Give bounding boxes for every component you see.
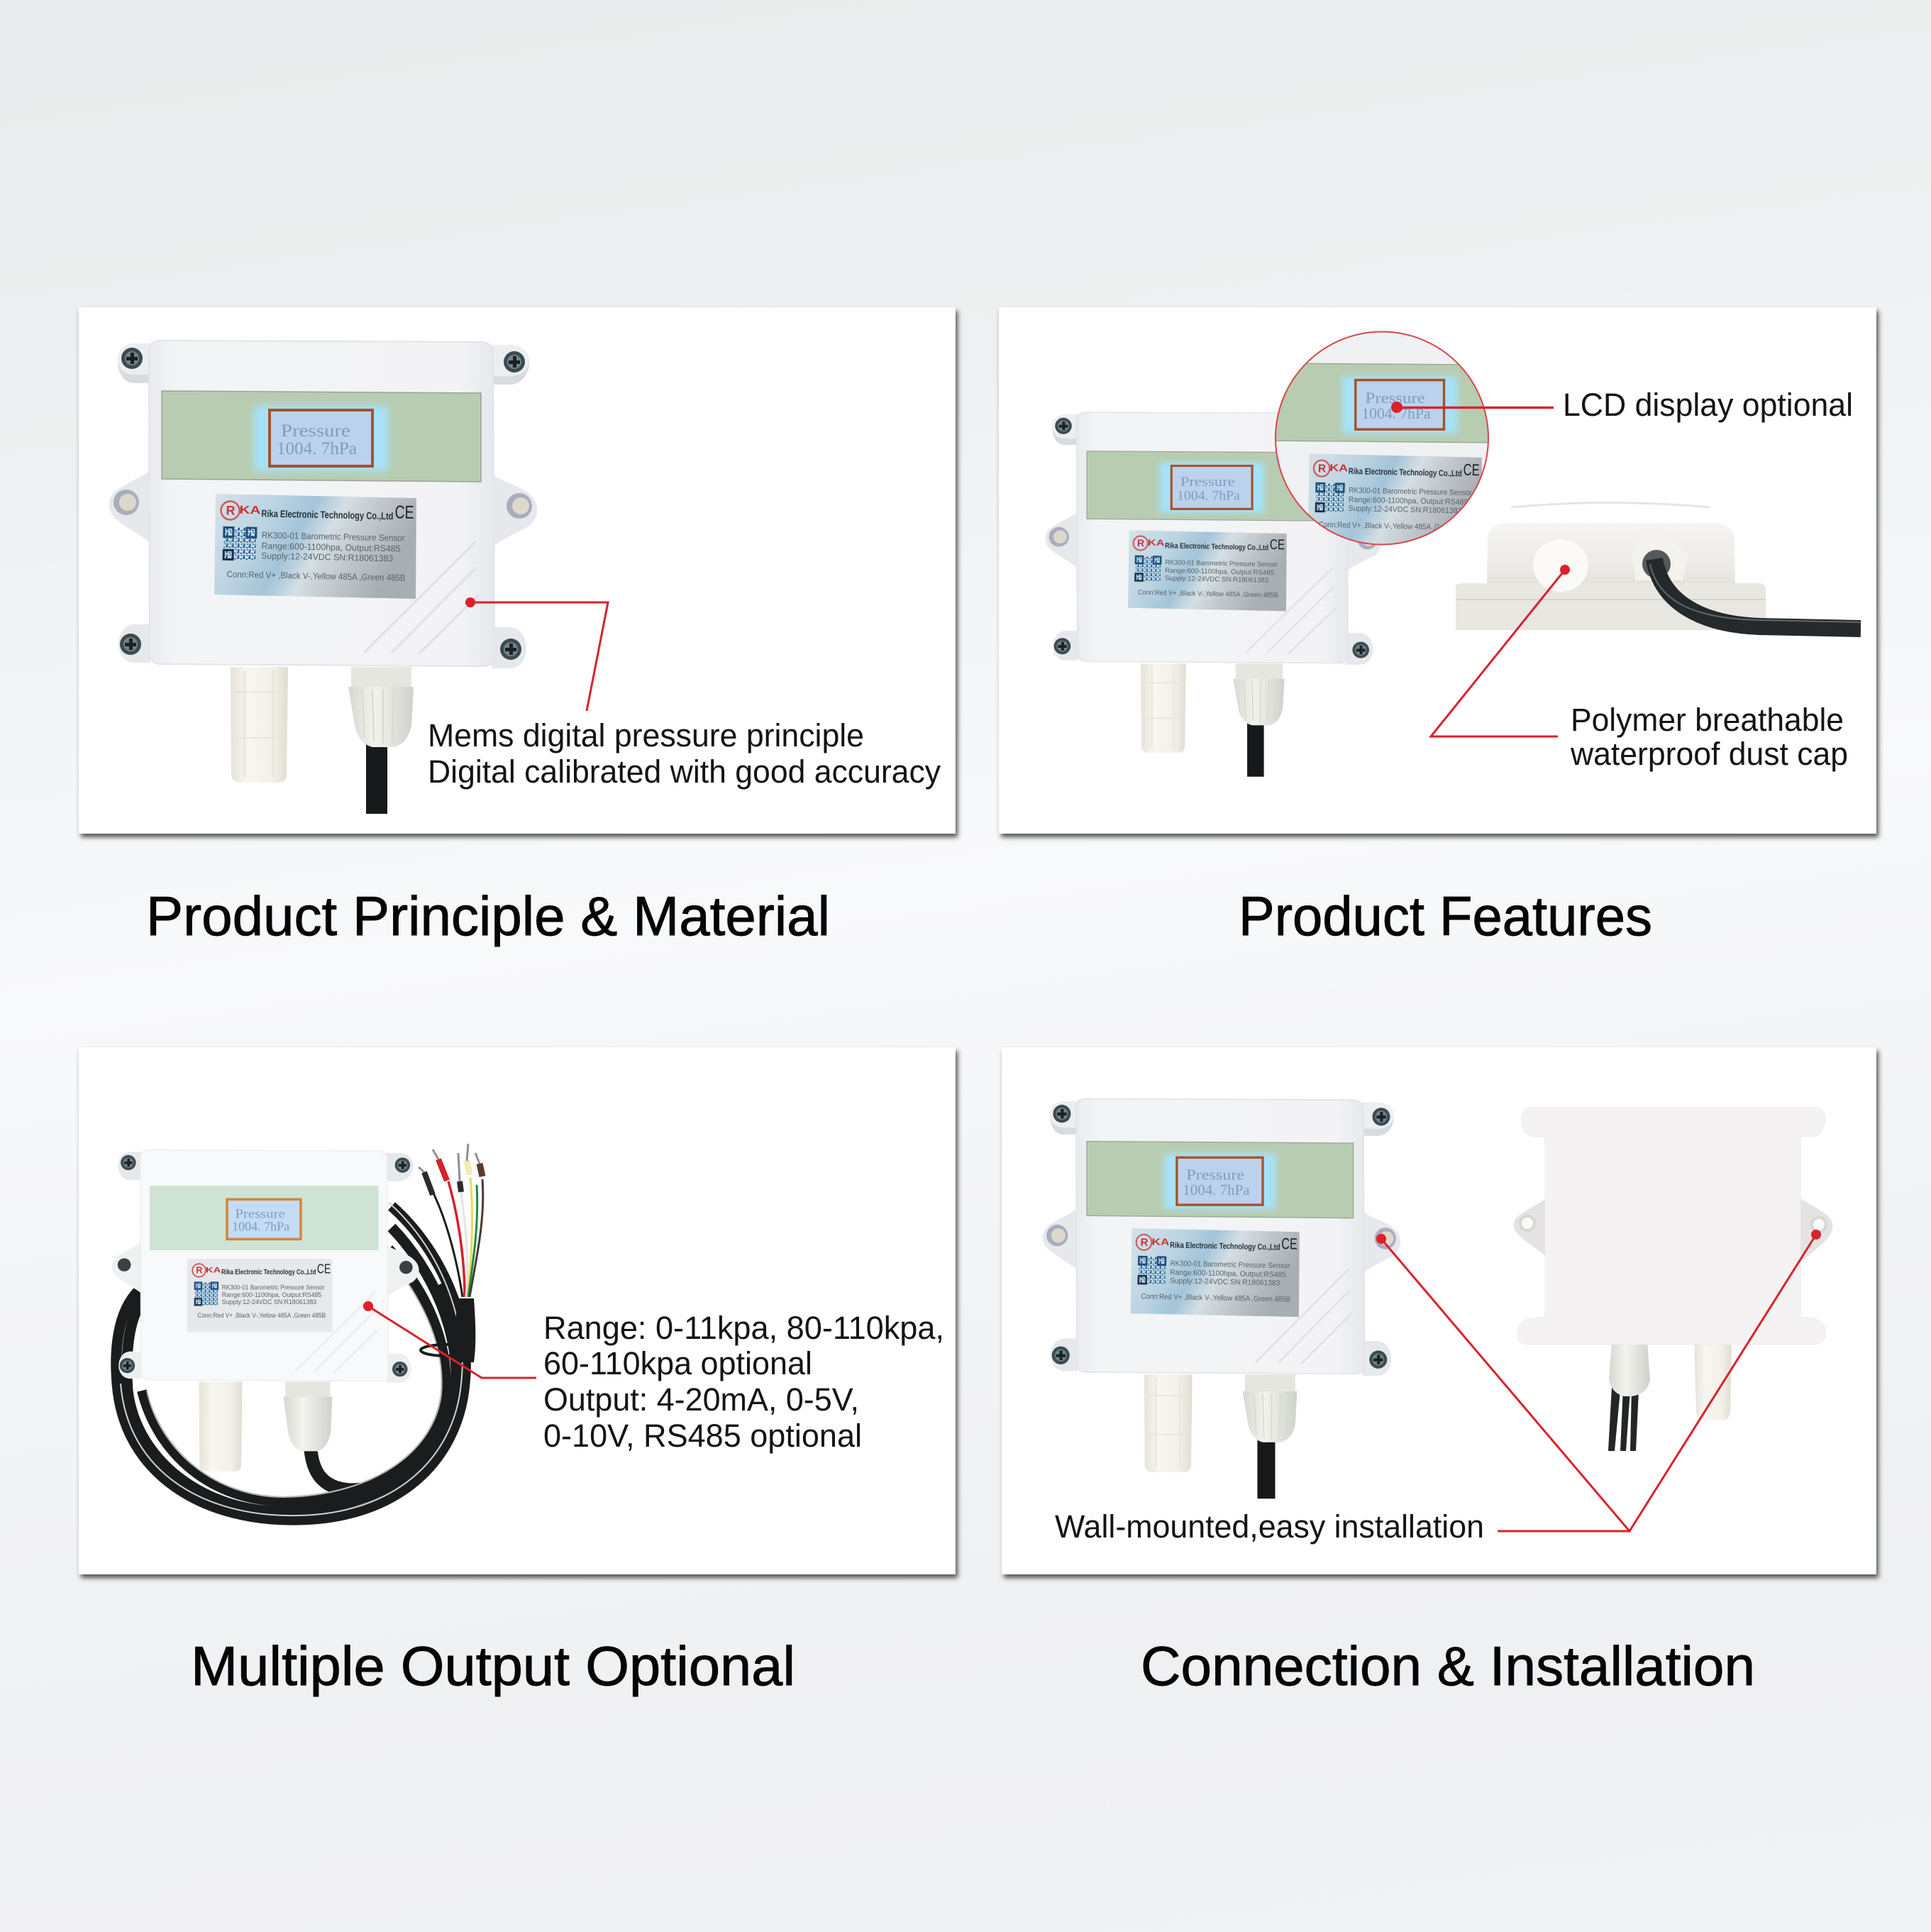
magnified circle of display and label: KA — [1329, 462, 1348, 473]
sensor photo: front view: Pressure — [281, 421, 350, 441]
callout text: Range: 0-11kpa, 80-110kpa, — [543, 1310, 944, 1346]
sensor photo: front view: Pressure — [1180, 475, 1235, 490]
sensor photo: front view with white body: KA — [206, 1266, 221, 1274]
callout text: Mems digital pressure principle — [428, 717, 864, 754]
magnified circle of display and label: R — [1318, 463, 1326, 475]
callout text — [543, 1310, 944, 1454]
heading: multiple output optional: Multiple Output Optional — [191, 1635, 795, 1697]
sensor photo: front view: CE — [1270, 537, 1285, 553]
sensor photo: front view with white body: 1004. 7hPa — [232, 1219, 289, 1233]
coiled black cable — [116, 1203, 465, 1520]
sensor photo: front view: Range:600-1100hpa, Output:RS485 — [1170, 1268, 1286, 1279]
magnified circle of display and label: Pressure — [1366, 390, 1425, 407]
callout text: Output: 4-20mA, 0-5V, — [543, 1381, 859, 1418]
callout text: Wall-mounted,easy installation — [1055, 1508, 1484, 1545]
sensor photo: front view: 1004. 7hPa — [277, 439, 357, 458]
sensor photo: front view with white body: CE — [317, 1262, 331, 1276]
sensor photo: front view — [1043, 1099, 1400, 1498]
panel: connection and installation — [1002, 1047, 1876, 1574]
sleeve and coloured wires with pins — [419, 1144, 483, 1362]
sensor photo: front view: Conn:Red V+ ,Black V-,Yellow 485A ,Green 485B — [226, 569, 406, 583]
sensor photo: front view: R — [1137, 537, 1144, 548]
sensor photo: front view with white body: RK300-01 Barometric Pressure Sensor — [222, 1284, 325, 1291]
panel: product features — [999, 307, 1876, 834]
sensor photo: front view: R — [1140, 1237, 1149, 1249]
panel: product principle and material — [79, 307, 956, 834]
heading: product features: Product Features — [1239, 885, 1652, 947]
dust cap pointer — [1431, 565, 1570, 736]
sensor photo: front view: 1004. 7hPa — [1177, 488, 1240, 503]
magnified circle of display and label: CE — [1463, 460, 1480, 479]
dust cap callout text: waterproof dust cap — [1570, 736, 1848, 772]
sensor photo: front view: KA — [1151, 1236, 1170, 1247]
magnified circle of display and label: Rika Electronic Technology Co.,Ltd — [1349, 466, 1462, 478]
magnified circle of display and label: Range:600-1100hpa, Output:RS485 — [1349, 495, 1468, 507]
panel: multiple output optional — [79, 1047, 956, 1574]
sensor photo: front view: KA — [239, 504, 261, 517]
heading: product principle and material: Product Principle & Material — [146, 885, 830, 947]
sensor photo: underside with dust cap and cable — [1456, 502, 1861, 630]
sensor photo: front view — [109, 341, 537, 814]
sensor photo: front view with white body: Supply:12-24VDC SN:R18061383 — [222, 1298, 316, 1306]
magnified circle of display and label: Conn:Red V+ ,Black V-,Yellow 485A ,Green 485B — [1319, 521, 1473, 532]
sensor photo: front view: RK300-01 Barometric Pressure Sensor — [1170, 1259, 1290, 1270]
magnified circle of display and label: Supply:12-24VDC SN:R18061383 — [1349, 504, 1462, 515]
sensor photo: front view with white body: Pressure — [235, 1207, 285, 1221]
callout text: 0-10V, RS485 optional — [543, 1418, 862, 1454]
sensor photo: front view: Pressure — [1186, 1166, 1244, 1183]
sensor photo: front view: Supply:12-24VDC SN:R18061383 — [1170, 1276, 1280, 1288]
sensor photo: front view: Supply:12-24VDC SN:R18061383 — [1165, 575, 1268, 585]
sensor photo: front view: Supply:12-24VDC SN:R18061383 — [261, 551, 393, 563]
callout pointer — [363, 1301, 536, 1378]
sensor photo: front view: Rika Electronic Technology Co.,Ltd — [1165, 541, 1268, 552]
callout pointer — [465, 597, 608, 711]
callout text: Digital calibrated with good accuracy — [428, 754, 941, 790]
sensor photo: front view — [1046, 412, 1382, 777]
callout text: 60-110kpa optional — [543, 1345, 812, 1381]
sensor photo: front view with white body: Conn:Red V+ ,Black V-,Yellow 485A ,Green 485B — [197, 1312, 326, 1319]
installation pointers — [1376, 1230, 1821, 1531]
sensor photo: front view: KA — [1148, 538, 1165, 548]
sensor photo: front view with white body: R — [196, 1265, 203, 1276]
sensor photo: front view: RK300-01 Barometric Pressure Sensor — [262, 530, 405, 543]
sensor photo: front view: Range:600-1100hpa, Output:RS485 — [1165, 567, 1274, 577]
sensor photo: front view with white body: Rika Electronic Technology Co.,Ltd — [221, 1269, 316, 1276]
sensor photo: front view: Conn:Red V+ ,Black V-,Yellow 485A ,Green 485B — [1141, 1292, 1290, 1304]
dust cap callout text — [1570, 702, 1848, 772]
sensor photo: front view: Range:600-1100hpa, Output:RS485 — [261, 541, 401, 554]
sensor photo: front view: CE — [1281, 1235, 1298, 1253]
sensor photo: front view: 1004. 7hPa — [1183, 1181, 1250, 1198]
sensor photo: front view: Rika Electronic Technology Co.,Ltd — [1170, 1240, 1280, 1252]
magnified circle of display and label: 1004. 7hPa — [1361, 405, 1431, 422]
sensor photo: front view with white body — [112, 1150, 419, 1472]
heading: connection and installation: Connection & Installation — [1141, 1635, 1755, 1697]
LCD pointer — [1391, 402, 1554, 413]
LCD callout text: LCD display optional — [1563, 387, 1853, 423]
sensor photo: front view: Rika Electronic Technology Co.,Ltd — [261, 507, 394, 521]
sensor photo: front view: RK300-01 Barometric Pressure Sensor — [1165, 559, 1278, 569]
sensor photo: front view with white body: Range:600-1100hpa, Output:RS485 — [222, 1291, 321, 1298]
sensor photo: front view: R — [226, 503, 236, 518]
magnified circle of display and label — [1275, 331, 1489, 545]
sensor photo: front view: Conn:Red V+ ,Black V-,Yellow 485A ,Green 485B — [1138, 589, 1278, 600]
dust cap callout text: Polymer breathable — [1571, 702, 1844, 738]
sensor photo: front view: CE — [394, 501, 414, 523]
magnified circle of display and label: RK300-01 Barometric Pressure Sensor — [1349, 486, 1472, 497]
callout text — [428, 717, 941, 790]
sensor photo: back view — [1514, 1108, 1832, 1451]
